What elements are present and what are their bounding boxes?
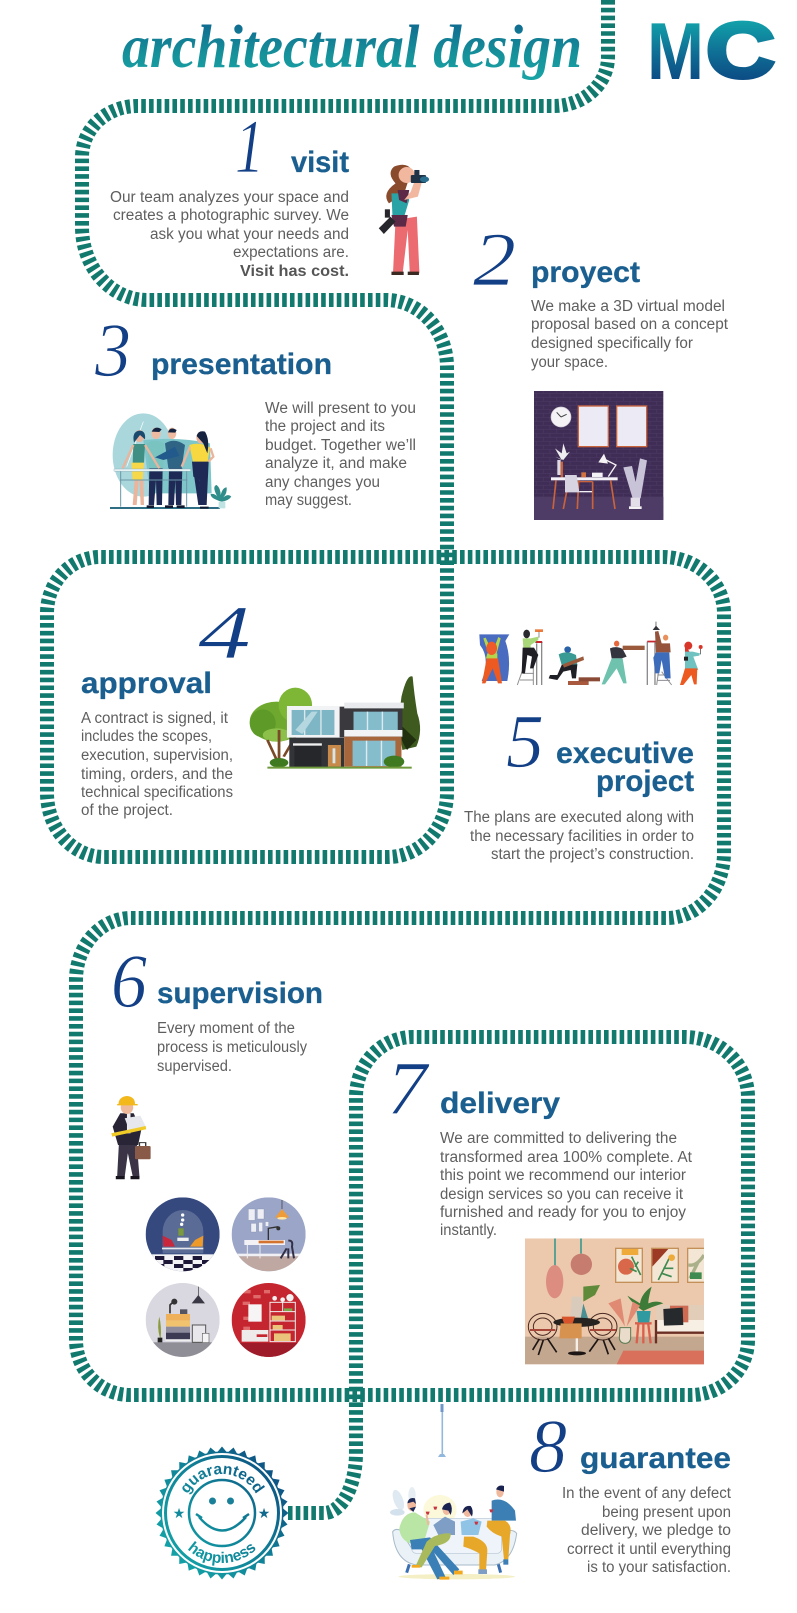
number 7: 7 — [387, 1047, 430, 1131]
icon: photographer — [379, 165, 429, 275]
number 4: 4 — [198, 591, 251, 675]
badge: guaranteed happiness seal: happiness — [188, 1541, 256, 1566]
text: presentation description: budget. Together we’ll — [265, 437, 416, 454]
text: delivery description: this point we recommend our interior — [440, 1167, 686, 1184]
heading: presentation: presentation — [151, 348, 332, 381]
text: presentation description: the project and its — [265, 418, 385, 435]
text: supervision description — [157, 1020, 307, 1075]
text: guarantee description: correct it until everything — [567, 1541, 731, 1558]
text: executive project description: The plans are executed along with — [464, 809, 694, 826]
heading: delivery: delivery — [440, 1087, 560, 1120]
text: delivery description: instantly. — [440, 1222, 497, 1239]
image group: four round interiors — [146, 1197, 306, 1357]
text: approval description: A contract is signed, it — [81, 710, 229, 727]
number 5: 5 — [506, 700, 544, 784]
badge: guaranteed happiness seal: ★ — [258, 1505, 270, 1521]
text: supervision description: process is meticulously — [157, 1039, 307, 1056]
circle: navy lounge — [146, 1197, 220, 1274]
text: proyect description: designed specifically for — [531, 335, 693, 352]
icon: modern house with trees — [250, 676, 420, 769]
person 2 and 3 — [147, 428, 185, 505]
icon: hanging lamp — [438, 1404, 446, 1457]
text: presentation description: any changes you — [265, 474, 380, 491]
text: guarantee description: is to your satisfaction. — [587, 1559, 731, 1576]
text: executive project description: start the project’s construction. — [491, 846, 694, 863]
text: guarantee description — [562, 1485, 732, 1576]
heading: approval: approval — [81, 667, 212, 700]
panel: step 7 delivery — [387, 1047, 706, 1364]
text: proyect description: proposal based on a concept — [531, 316, 729, 333]
text: approval description: includes the scopes, — [81, 728, 212, 745]
woman in blue-grey — [412, 1503, 455, 1568]
text: executive project description: the necessary facilities in order to — [470, 828, 694, 845]
heading: proyect: proyect — [531, 256, 640, 289]
text: proyect description: your space. — [531, 354, 608, 371]
number 1: 1 — [235, 105, 264, 189]
panel: step 1 visit — [110, 105, 429, 280]
heading: guarantee: guarantee — [580, 1442, 731, 1475]
text: approval description — [81, 710, 233, 819]
panel: step 5 executive project — [464, 622, 703, 863]
man in blue on sofa back — [487, 1485, 516, 1565]
number 2: 2 — [473, 218, 516, 302]
panel: step 2 proyect — [473, 218, 729, 520]
woman with flower — [680, 642, 703, 685]
logo: MC — [647, 6, 775, 97]
circle: periwinkle office — [232, 1197, 306, 1271]
man in green — [399, 1498, 463, 1580]
text: executive project description — [464, 809, 694, 863]
text: guarantee description: being present upon — [602, 1504, 731, 1521]
worker with blue poster — [479, 634, 509, 683]
title: architectural design — [122, 14, 582, 81]
text: presentation description: We will present to you — [265, 400, 416, 417]
text: presentation description: analyze it, and make — [265, 455, 407, 472]
badge: guaranteed happiness seal — [156, 1446, 288, 1580]
logo: MC: M — [647, 7, 704, 97]
text: visit description: ask you what your needs and — [150, 226, 349, 243]
text: approval description: of the project. — [81, 802, 173, 819]
image: purple brick room with desk — [534, 391, 663, 520]
icon: friends toasting on a sofa — [390, 1485, 517, 1580]
heading: executive project: executive — [556, 737, 694, 770]
text: visit description: Our team analyzes your space and — [110, 189, 349, 206]
worker on ladder with lamp — [647, 622, 672, 685]
number 3: 3 — [94, 309, 131, 393]
heading: visit: visit — [291, 146, 349, 179]
text: guarantee description: In the event of any defect — [562, 1485, 732, 1502]
wine glasses — [426, 1507, 493, 1525]
number 6: 6 — [111, 940, 147, 1024]
number 8: 8 — [529, 1405, 567, 1489]
kneeling worker and bricks — [549, 646, 600, 685]
person 4 — [182, 431, 213, 505]
text: presentation description: may suggest. — [265, 492, 352, 509]
circle: grey bedroom drawers — [146, 1283, 220, 1357]
badge: guaranteed happiness seal: ★ — [173, 1505, 185, 1521]
image: furnished living room — [525, 1238, 706, 1364]
text: visit description: creates a photographic survey. We — [113, 207, 349, 224]
painter on ladder — [517, 629, 543, 685]
icon: team around a table — [110, 413, 231, 509]
circle: red shelves — [232, 1283, 306, 1357]
text: approval description: execution, supervision, — [81, 747, 233, 764]
text: approval description: timing, orders, and the — [81, 766, 233, 783]
panel: step 6 supervision — [111, 940, 323, 1357]
person 1 — [123, 430, 159, 505]
text: presentation description — [265, 400, 416, 509]
logo: MC: C — [706, 6, 775, 94]
icon: construction workers — [479, 622, 703, 685]
icon: supervisor with helmet and level — [111, 1096, 151, 1179]
text: delivery description: transformed area 100% complete. At — [440, 1149, 693, 1166]
text: delivery description: design services so you can receive it — [440, 1186, 684, 1203]
heading: executive project: project — [596, 765, 694, 798]
text: delivery description: We are committed to delivering the — [440, 1130, 677, 1147]
text: approval description: technical specifications — [81, 784, 233, 801]
walking worker with plank — [602, 641, 645, 684]
text: delivery description: furnished and ready for you to enjoy — [440, 1204, 686, 1221]
heading: executive project — [556, 737, 694, 798]
text: supervision description: Every moment of the — [157, 1020, 295, 1037]
panel: step 8 guarantee — [390, 1404, 732, 1580]
text: visit description — [110, 189, 349, 280]
text: delivery description — [440, 1130, 693, 1239]
text: guarantee description: delivery, we pledge to — [581, 1522, 731, 1539]
heading: supervision: supervision — [157, 977, 323, 1010]
panel: step 4 approval — [81, 591, 420, 819]
text: proyect description — [531, 298, 729, 371]
text: visit description: Visit has cost. — [240, 263, 349, 280]
panel: step 3 presentation — [94, 309, 416, 509]
text: visit description: expectations are. — [233, 244, 349, 261]
badge: guaranteed happiness seal: guaranteed — [182, 1466, 265, 1494]
text: proyect description: We make a 3D virtual model — [531, 298, 725, 315]
woman in light blue — [461, 1506, 487, 1574]
text: supervision description: supervised. — [157, 1058, 232, 1075]
